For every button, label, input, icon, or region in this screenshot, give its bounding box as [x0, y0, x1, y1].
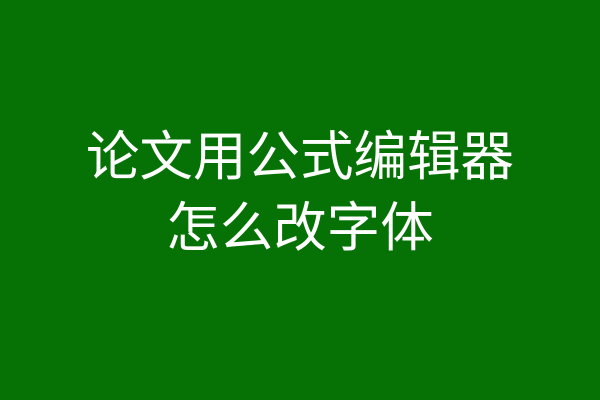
title	[86, 128, 514, 258]
title: 论文用公式编辑器	[86, 128, 514, 187]
title: 怎么改字体	[166, 199, 434, 258]
